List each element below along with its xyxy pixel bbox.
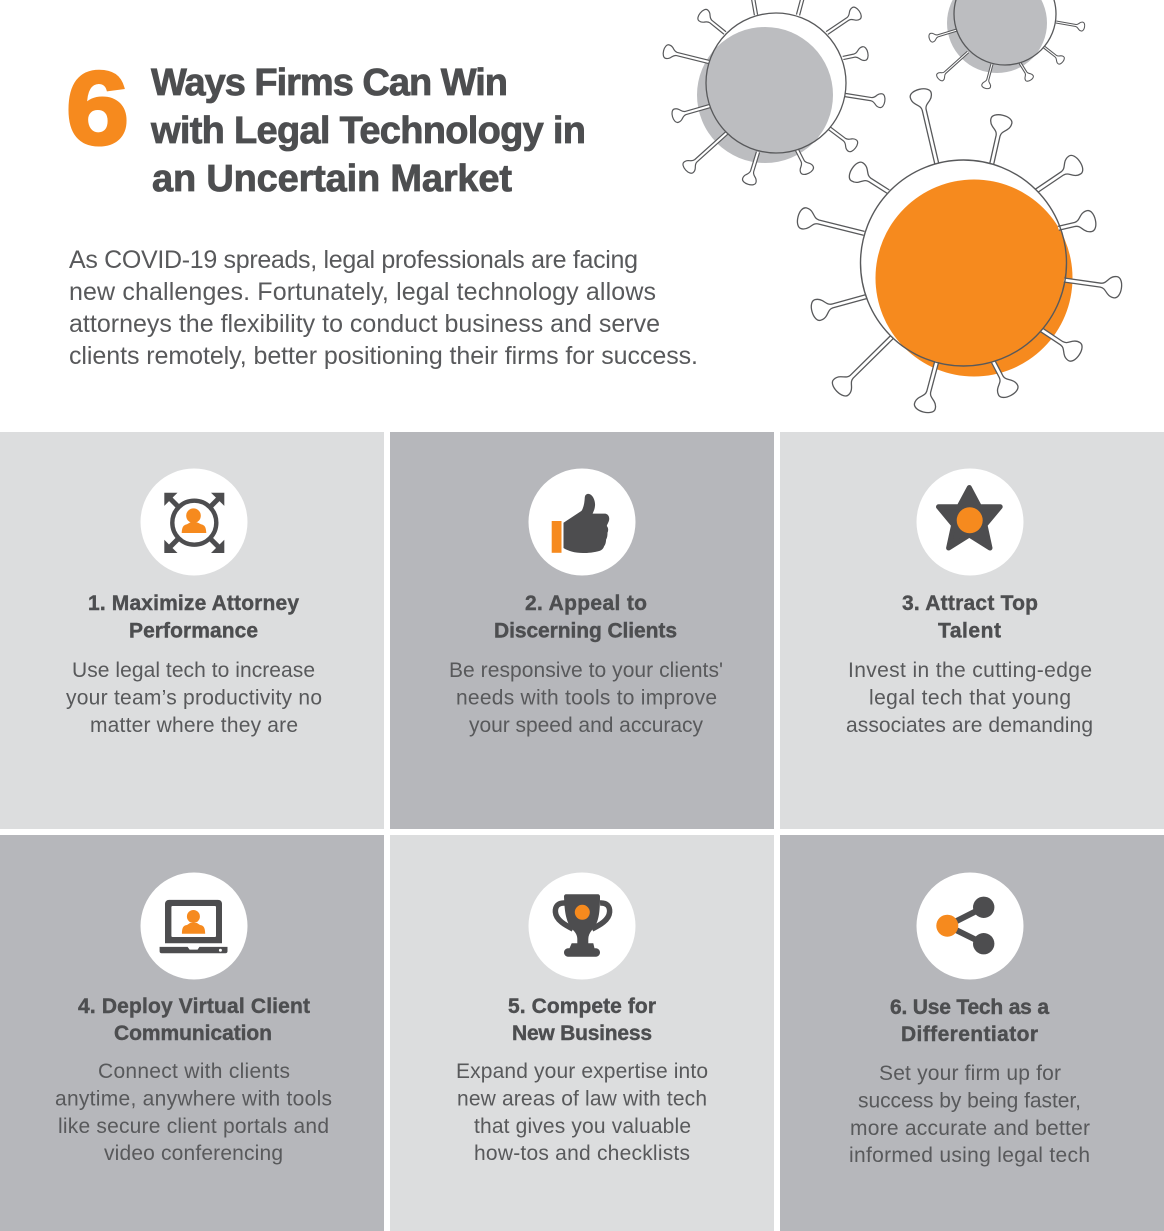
intro paragraph: attorneys the flexibility to conduct business and serve [69,310,660,338]
description: needs with tools to improve [456,686,717,710]
intro paragraph: clients remotely, better positioning their firms for success. [69,342,698,370]
title: Ways Firms Can Win [151,62,508,104]
big orange numeral 6: 6 [66,51,129,167]
panel: 2. Appeal to Discerning Clients [390,432,774,829]
heading: Talent [938,620,1001,642]
icon: laptop with person [160,900,228,953]
description: Invest in the cutting-edge [848,659,1092,682]
description: Be responsive to your clients' [449,659,723,682]
description: legal tech that young [869,686,1071,710]
heading [494,592,677,642]
heading: Performance [129,620,258,642]
panel: 5. Compete for New Business [390,835,774,1231]
panel: 3. Attract Top Talent [780,432,1164,829]
description: your speed and accuracy [469,714,704,737]
icon: share nodes [936,897,994,954]
heading: 3. Attract Top [902,592,1038,615]
heading [902,592,1038,642]
illustration: grey virus top left [662,0,886,186]
description: new areas of law with tech [457,1088,707,1110]
heading: 5. Compete for [508,995,656,1018]
intro paragraph [69,246,698,370]
description [849,1062,1090,1167]
icon: star with orange dot [938,488,1000,548]
heading: 2. Appeal to [525,592,647,615]
description: Set your firm up for [879,1062,1061,1085]
title [150,62,586,200]
panel: 4. Deploy Virtual Client Communication [0,835,384,1231]
heading: Communication [114,1022,272,1045]
heading: 6. Use Tech as a [890,996,1049,1019]
heading: New Business [512,1022,652,1045]
description: like secure client portals and [58,1115,329,1138]
description [456,1060,708,1165]
icon: thumbs up [552,494,609,553]
description: Expand your expertise into [456,1060,708,1083]
description: Use legal tech to increase [72,659,315,682]
intro paragraph: new challenges. Fortunately, legal technology allows [69,278,656,306]
icon: expanding arrows around person [164,493,224,553]
panel: 1. Maximize Attorney Performance [0,432,384,829]
heading [890,996,1049,1046]
intro paragraph: As COVID-19 spreads, legal professionals are facing [69,246,638,274]
heading: 1. Maximize Attorney [88,592,299,615]
heading: Discerning Clients [494,620,677,642]
heading [508,995,656,1045]
panel: 6. Use Tech as a Differentiator [780,835,1164,1231]
title: with Legal Technology in [150,110,586,152]
description: video conferencing [104,1142,283,1165]
title: an Uncertain Market [152,158,512,200]
description [55,1060,332,1165]
heading [78,995,310,1045]
description: that gives you valuable [474,1115,691,1138]
description: matter where they are [90,714,298,737]
description: success by being faster, [858,1090,1081,1112]
heading: Differentiator [901,1023,1038,1046]
heading: 4. Deploy Virtual Client [78,995,310,1018]
illustration: grey virus top right [928,0,1085,90]
illustration: large orange virus [795,87,1123,415]
description: your team’s productivity no [66,686,322,710]
description: Connect with clients [98,1060,290,1083]
description [449,659,723,737]
description [66,659,322,737]
description: informed using legal tech [849,1144,1090,1167]
description: how-tos and checklists [474,1142,690,1165]
description [846,659,1093,737]
description: more accurate and better [850,1117,1090,1140]
heading [88,592,299,642]
description: associates are demanding [846,714,1093,737]
icon: trophy [555,894,610,957]
description: anytime, anywhere with tools [55,1088,332,1110]
